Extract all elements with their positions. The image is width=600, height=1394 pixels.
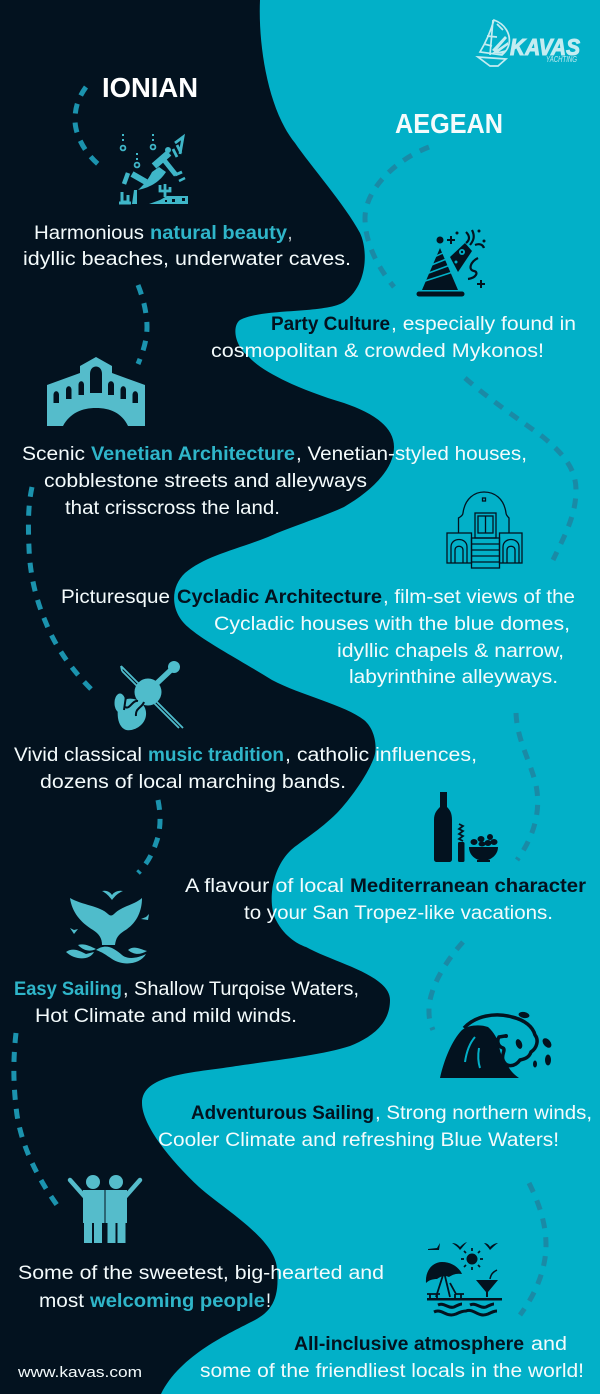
dashed path: Aegean 5 (520, 1183, 546, 1315)
logo: Kavas Yachting (478, 20, 581, 66)
icon: two friends (70, 1175, 140, 1243)
text: party culture: , especially found in (391, 314, 576, 335)
text: Cycladic architecture: Picturesque (61, 587, 170, 608)
text: easy sailing: Hot Climate and mild winds. (35, 1006, 297, 1027)
text: all-inclusive atmosphere: All-inclusive atmosphere (294, 1334, 524, 1355)
text: Venetian architecture: Venetian Architecture (91, 444, 295, 465)
text: adventurous sailing: Cooler Climate and refreshing Blue Waters! (158, 1130, 559, 1151)
text: music tradition: music tradition (148, 745, 284, 766)
text: adventurous sailing (158, 1103, 592, 1151)
text: Cycladic architecture: Cycladic Architecture (177, 587, 382, 608)
text: natural beauty: natural beauty (150, 223, 287, 244)
text: welcoming people: welcoming people (89, 1291, 265, 1312)
text: party culture: Party Culture (271, 314, 390, 335)
text: Cycladic architecture: labyrinthine alleyways. (349, 667, 558, 688)
text: all-inclusive atmosphere: and (531, 1334, 567, 1355)
text: welcoming people (18, 1263, 384, 1312)
text: Venetian architecture: Scenic (22, 444, 85, 465)
text: Mediterranean character (185, 876, 587, 924)
dashed path: Aegean 1 (365, 147, 429, 287)
dashed path: Ionian 4 (138, 800, 160, 873)
icon: party hat (419, 230, 486, 294)
website url: www.kavas.com (17, 1364, 142, 1381)
dashed path: Ionian 3 (28, 487, 92, 690)
text: all-inclusive atmosphere (200, 1334, 584, 1382)
dashed path: Aegean 2 (465, 378, 576, 560)
text: welcoming people: most (39, 1291, 85, 1312)
text: music tradition (14, 745, 477, 793)
heading: Ionian: IONIAN (102, 72, 198, 103)
text: party culture (211, 314, 576, 362)
logo: Kavas Yachting: KAVAS (510, 34, 581, 60)
text: all-inclusive atmosphere: some of the friendliest locals in the world! (200, 1361, 584, 1382)
text: Cycladic architecture: idyllic chapels & narrow, (337, 641, 564, 662)
dashed path: Ionian 5 (14, 1033, 57, 1205)
text: Cycladic architecture: , film-set views of the (383, 587, 575, 608)
text: welcoming people: Some of the sweetest, big-hearted and (18, 1263, 384, 1284)
text: adventurous sailing: , Strong northern winds, (375, 1103, 592, 1124)
text: Cycladic architecture: Cycladic houses with the blue domes, (214, 614, 570, 635)
text: easy sailing (14, 979, 359, 1027)
text: natural beauty: idyllic beaches, underwater caves. (23, 249, 351, 270)
text: music tradition: , catholic influences, (285, 745, 477, 766)
dashed path: Ionian 2 (138, 285, 147, 364)
text: Cycladic architecture (61, 587, 575, 688)
text: Venetian architecture: cobblestone streets and alleyways (44, 471, 367, 492)
text: natural beauty (23, 223, 351, 270)
dark wave panel: Ionian side (0, 0, 394, 1394)
icon: Rialto bridge (47, 357, 145, 426)
text: music tradition: Vivid classical (14, 745, 142, 766)
dashed path: Ionian 1 (75, 87, 98, 164)
icon: violin (114, 661, 183, 730)
text: natural beauty: Harmonious (34, 223, 144, 244)
dashed path: Aegean 4 (429, 942, 463, 1030)
text: easy sailing: , Shallow Turqoise Waters, (123, 979, 359, 1000)
text: Mediterranean character: to your San Tropez-like vacations. (244, 903, 553, 924)
logo: Kavas Yachting: YACHTING (546, 55, 577, 64)
text: Mediterranean character: Mediterranean character (350, 876, 587, 897)
text: music tradition: dozens of local marching bands. (40, 772, 346, 793)
text: Mediterranean character: A flavour of local (185, 876, 344, 897)
icon: beach with umbrella and cocktail (426, 1242, 502, 1315)
text: welcoming people: ! (266, 1291, 271, 1312)
text: party culture: cosmopolitan & crowded Mykonos! (211, 341, 544, 362)
icon: breaking wave (440, 1011, 553, 1078)
text: Venetian architecture (22, 444, 527, 519)
heading: Aegean: AEGEAN (395, 108, 503, 139)
icon: Cycladic chapel (447, 492, 522, 568)
icon: scuba diver (119, 134, 188, 204)
text: natural beauty: , (288, 223, 292, 244)
text: easy sailing: Easy Sailing (14, 979, 122, 1000)
dashed path: Aegean 3 (516, 713, 538, 860)
text: Venetian architecture: , Venetian-styled houses, (296, 444, 527, 465)
text: adventurous sailing: Adventurous Sailing (191, 1103, 374, 1124)
icon: wine, corkscrew and olives (434, 792, 498, 862)
text: Venetian architecture: that crisscross the land. (65, 498, 280, 519)
icon: whale tail (66, 891, 149, 963)
